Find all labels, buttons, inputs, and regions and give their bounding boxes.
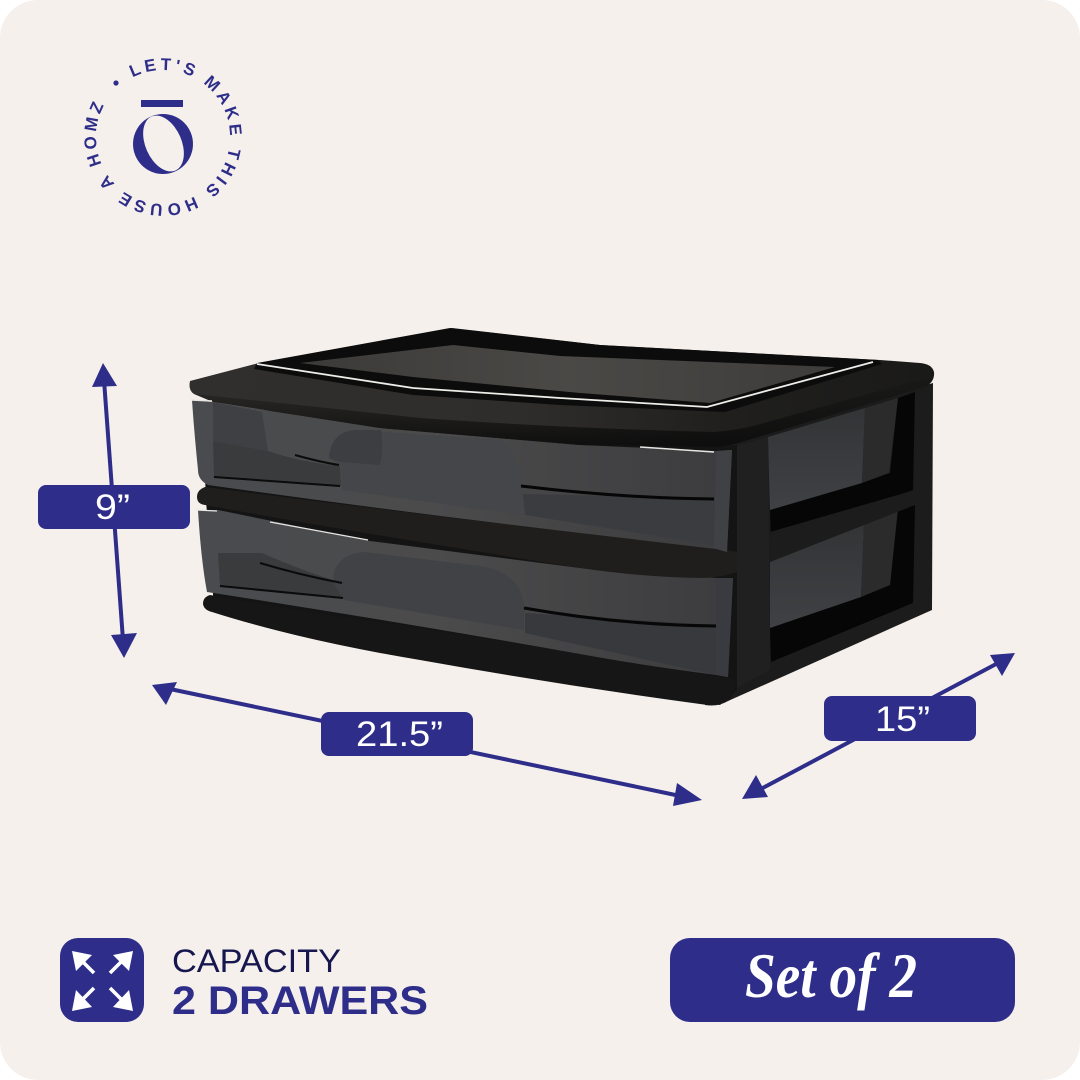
lower side window (770, 524, 864, 628)
label: 21.5 inch: 21.5” (356, 715, 443, 754)
badge: set of 2: Set of 2 (745, 940, 917, 1011)
label: 21.5 inch (321, 712, 473, 756)
white rail highlight (196, 510, 368, 540)
icon: capacity arrows (60, 938, 144, 1022)
arrow: depth (742, 653, 1015, 799)
middle rail (197, 487, 737, 578)
lower drawer right recess (525, 613, 716, 675)
lid body (190, 328, 934, 447)
logo badge (84, 58, 242, 216)
lower drawer right edge (716, 578, 733, 677)
upper drawer left panel (213, 441, 341, 486)
arrow: height (92, 363, 137, 658)
upper drawer left seam (214, 455, 340, 486)
side frame (700, 383, 933, 706)
label: 15 inch (824, 696, 976, 741)
upper drawer right edge (714, 450, 732, 552)
base rail (203, 595, 737, 705)
logo o mark (133, 109, 193, 178)
label: 15 inch: 15” (875, 700, 930, 739)
product: two drawer unit (190, 328, 934, 706)
upper drawer handle (329, 430, 522, 515)
upper drawer top left tint (213, 402, 268, 451)
lower drawer left panel (218, 553, 344, 598)
label: 9 inch: 9” (95, 488, 130, 527)
lower drawer seam (524, 608, 716, 626)
lower drawer left seam (220, 563, 343, 598)
tray rim (254, 328, 882, 412)
circular slogan: LET'S MAKE THIS HOUSE A HOMZ (84, 58, 242, 216)
upper side window recess (770, 392, 915, 543)
logo dot (113, 80, 119, 86)
drawer top highlight (191, 400, 714, 452)
capacity label: CAPACITY (172, 943, 341, 979)
label: 9 inch (38, 485, 190, 529)
badge: set of 2 (670, 938, 1015, 1022)
side divider rail (770, 490, 915, 562)
lid front shading (194, 372, 934, 447)
logo macron bar (141, 100, 183, 107)
front pillar (733, 437, 770, 690)
upper side window (768, 408, 865, 510)
lower drawer front (198, 510, 733, 677)
arrow: width (152, 682, 702, 806)
capacity value: 2 DRAWERS (172, 979, 428, 1023)
tray inner panel (300, 345, 835, 403)
upper drawer right recess (523, 494, 716, 545)
upper drawer front (192, 400, 732, 552)
lower drawer handle (333, 552, 524, 630)
upper drawer handle dark tab (329, 430, 382, 465)
upper drawer seam (521, 486, 714, 499)
upper window inner panel (862, 398, 898, 483)
lower window inner panel (861, 508, 898, 597)
lower side window recess (770, 505, 915, 662)
front backing (202, 405, 737, 705)
tray white highlight (257, 362, 873, 407)
